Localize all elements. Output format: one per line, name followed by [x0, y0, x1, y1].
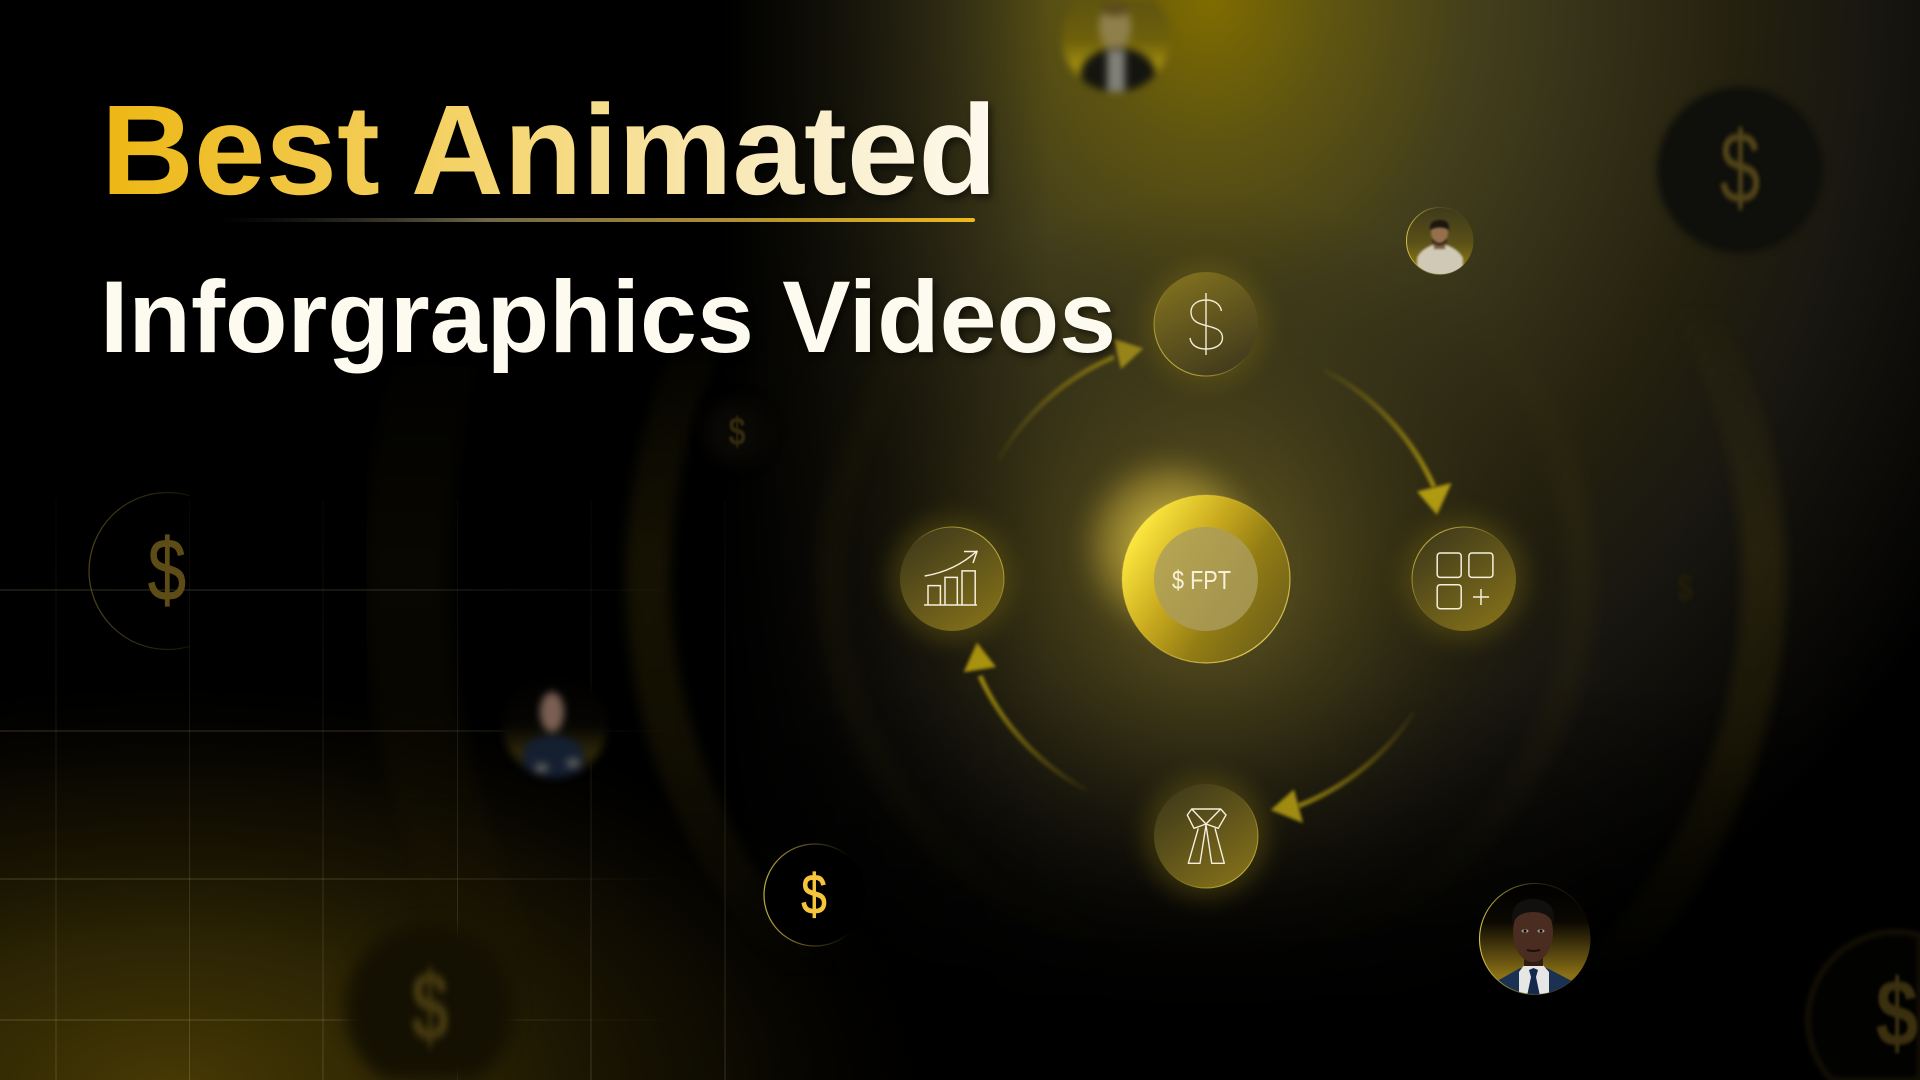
title — [100, 79, 1116, 374]
blurred coin: bottom left: $ — [411, 951, 449, 1061]
arrow: chart to dollar — [998, 339, 1144, 461]
heading underline — [221, 218, 975, 222]
person avatar: blurred left — [504, 687, 606, 782]
satellite: dollar — [1130, 248, 1282, 400]
coin: gold dollar — [764, 844, 866, 946]
icon: tie — [1187, 809, 1226, 863]
coin: gold dollar: $ — [801, 862, 827, 926]
arrow: tie to chart — [964, 642, 1088, 791]
person avatar: man in navy suit — [1478, 882, 1592, 998]
background concentric rings — [406, 20, 1764, 1020]
inner disc — [1154, 527, 1258, 631]
icon: dollar sign — [1190, 293, 1222, 355]
arrow: apps to tie — [1271, 712, 1414, 823]
blurred coin: small upper centre: $ — [728, 409, 746, 454]
blurred coin: bottom right — [1808, 932, 1920, 1080]
satellite: necktie — [1130, 760, 1282, 912]
cycle arrows — [964, 339, 1452, 823]
blurred coin: bottom right: $ — [1876, 960, 1918, 1067]
faint coin: left — [88, 492, 190, 650]
icon: tiles and plus — [1437, 553, 1493, 609]
blurred coin: top right — [1657, 87, 1823, 253]
satellite: apps grid — [1388, 503, 1540, 655]
background grid — [0, 500, 725, 1080]
blurred coin: small upper centre — [706, 401, 768, 463]
heading line 2: Inforgraphics Videos — [100, 260, 1116, 374]
center glow — [821, 190, 1591, 960]
heading line 1: Best Animated — [101, 79, 997, 222]
arrow: dollar to apps — [1324, 370, 1452, 515]
label: FPT: $ FPT — [1172, 565, 1231, 595]
person avatar: smiling man — [1405, 207, 1475, 277]
blurred coin: top right: $ — [1720, 111, 1760, 225]
satellite: growth chart — [876, 503, 1028, 655]
person avatar: blurred top — [1060, 0, 1172, 100]
faint coin: left: $ — [148, 521, 186, 619]
icon: bar chart with arrow — [924, 551, 977, 605]
blurred coin: bottom left — [345, 923, 515, 1080]
blurred coin: small far right: $ — [1677, 568, 1693, 608]
central coin — [1122, 495, 1290, 663]
